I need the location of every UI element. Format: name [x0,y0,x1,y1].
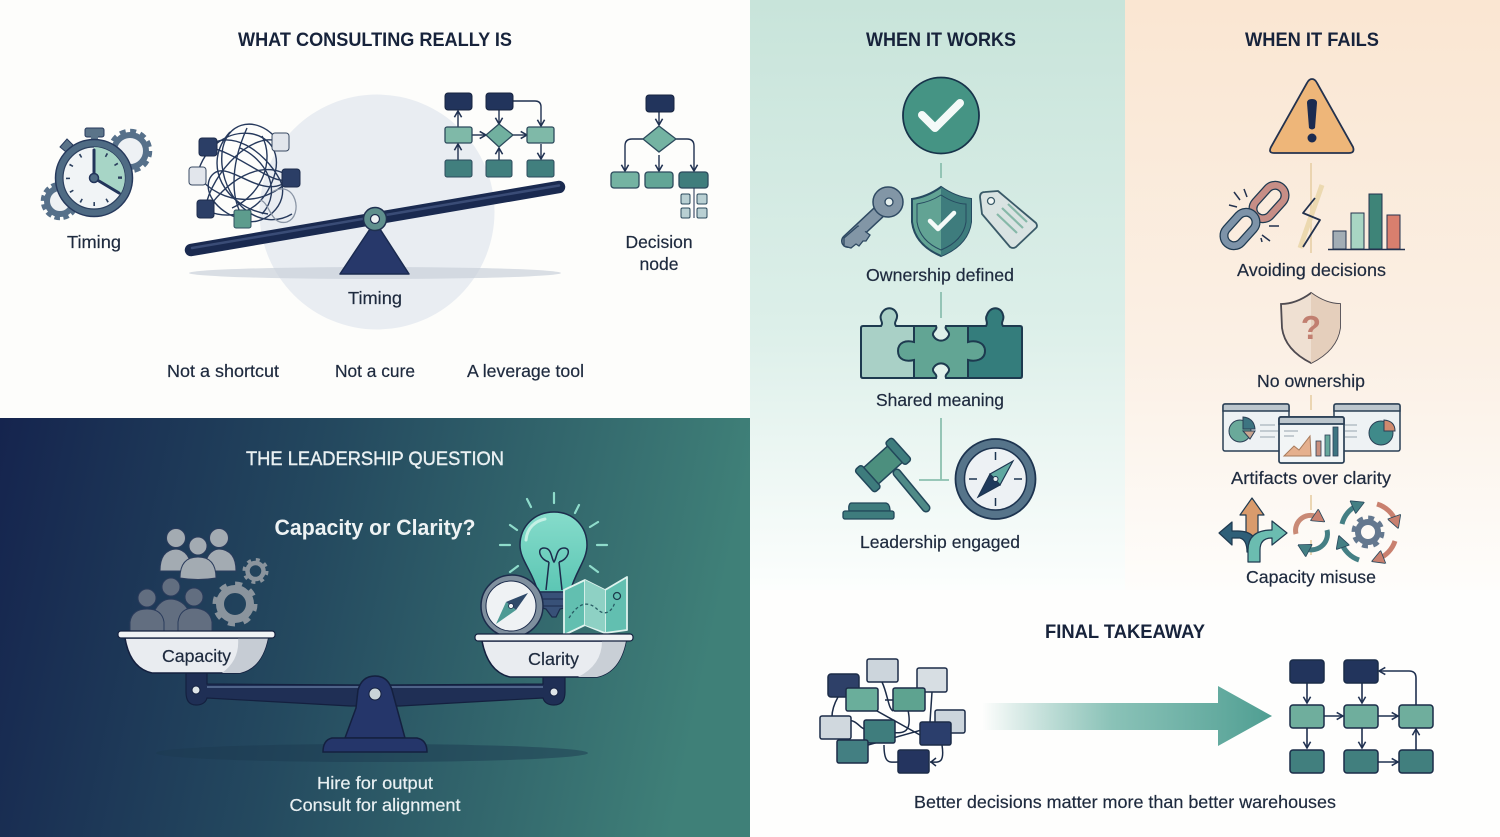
icon: key [844,187,903,248]
connector lines [1310,163,1312,555]
arrow: chaos to structure [982,686,1272,746]
icon: gavel [843,437,926,519]
icon: gear cycle [1341,504,1396,560]
icon: puzzle [861,308,1022,378]
right pan: clarity [475,634,633,677]
background circle [260,94,494,330]
label: leadership engaged: Leadership engaged [860,532,1020,552]
label: artifacts over clarity: Artifacts over clarity [1231,468,1391,488]
text: hire for output, consult for alignment: Consult for alignment [290,795,461,815]
label: a leverage tool: A leverage tool [467,361,584,381]
icon: shield with question: ? [1301,309,1321,346]
heading: when it works: WHEN IT WORKS [866,29,1016,51]
heading: what consulting really is: WHAT CONSULTING REALLY IS [238,29,512,51]
heading: final takeaway: FINAL TAKEAWAY [1045,621,1205,643]
label: decision node: node [640,254,678,274]
label: ownership defined: Ownership defined [866,265,1014,285]
icon: warning triangle [1270,79,1354,153]
panel: when it works [750,0,1125,590]
heading: capacity or clarity: Capacity or Clarity? [274,515,476,540]
icon: tangled network [189,124,300,228]
icon: decision node [611,95,708,218]
label: clarity: Clarity [528,649,579,669]
label: capacity: Capacity [162,646,231,666]
label: not a shortcut: Not a shortcut [167,361,279,381]
icon: seesaw [189,186,561,279]
label: no ownership: No ownership [1257,371,1365,391]
icon: forked arrows [1219,498,1287,562]
heading: the leadership question: THE LEADERSHIP QUESTION [246,449,504,470]
icon: shield with question [1281,293,1340,363]
label: capacity misuse: Capacity misuse [1246,567,1376,587]
icon: bar chart [1328,194,1405,250]
text: better decisions matter: Better decisions matter more than better warehouses [914,792,1336,812]
panel: final takeaway [750,590,1500,837]
icon: stopwatch with gears [43,128,150,218]
panel: the leadership question [0,418,750,837]
panel: what consulting really is [0,0,750,418]
label: shared meaning: Shared meaning [876,390,1004,410]
icon: people and gears [130,528,267,631]
icon: tangled boxes [820,659,965,773]
icon: bulb compass and map [481,493,627,637]
icon: lightning bolt [1300,185,1322,248]
icon: ordered flow [1290,660,1433,773]
icon: cycle arrows [1296,515,1327,550]
icon: check circle [903,78,979,154]
label: timing left: Timing [67,232,121,252]
label: decision node: Decision [625,232,693,252]
text: hire for output, consult for alignment: Hire for output [317,773,433,793]
icon: dashboards [1223,404,1400,463]
connector lines [919,163,949,480]
icon: compass [956,439,1036,519]
icon: shield with check [912,187,971,256]
heading: when it fails: WHEN IT FAILS [1245,29,1379,51]
panel: when it fails [1125,0,1500,590]
scale shadow [156,744,588,762]
icon: tag [980,191,1037,248]
label: avoiding decisions: Avoiding decisions [1237,260,1386,280]
label: timing centre: Timing [348,288,402,308]
icon: broken chain [1220,181,1289,250]
icon: structured flow [445,93,554,177]
icon: balance scale [186,670,565,752]
label: not a cure: Not a cure [335,361,415,381]
left pan: capacity [118,631,275,673]
